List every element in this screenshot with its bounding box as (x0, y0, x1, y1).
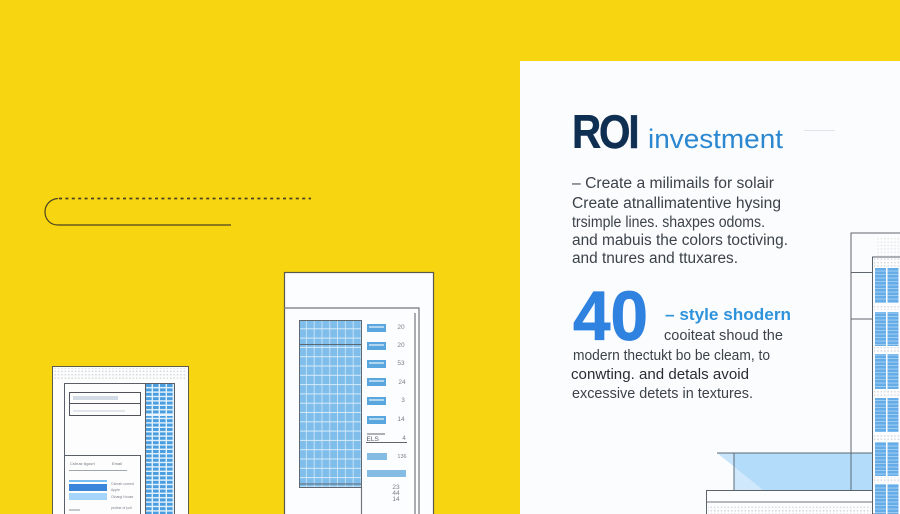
heading: investment (648, 124, 784, 154)
building 1 lower panel: proline of pull (111, 506, 132, 510)
building 2 row values (392, 324, 407, 503)
rear tower outline (851, 233, 900, 490)
building 2 row values: 14 (397, 416, 405, 423)
building 1 upper box (70, 392, 140, 416)
building 2 illustration (284, 272, 434, 514)
building 2 row values: 3 (401, 397, 405, 404)
intro paragraph: – Create a milimails for solair (572, 175, 774, 192)
heading rule (804, 130, 835, 132)
building 2 row values: 136 (397, 454, 407, 460)
building 2 row values: 24 (398, 379, 406, 386)
stat paragraph: modern thectukt bo be cleam, to (573, 347, 770, 364)
building 2 row values: 44 (392, 490, 400, 497)
building 1 window grid (146, 384, 174, 514)
building 2 label row (366, 434, 407, 443)
building 1 lower panel (65, 456, 140, 514)
building 1 lower panel: Email (112, 461, 122, 466)
intro paragraph: Create atnallimatentive hysing (572, 195, 781, 212)
intro paragraph: and mabuis the colors toctiving. (572, 232, 788, 249)
building 1 frame (64, 384, 174, 514)
building 1 illustration (52, 366, 188, 514)
building 1 lower panel: Apple (111, 488, 120, 492)
building 2 structure lines (284, 308, 419, 514)
pool glass (717, 453, 872, 490)
building 2 row values: 4 (402, 435, 406, 442)
white content panel (520, 61, 900, 514)
heading (572, 106, 784, 159)
building 3 illustration (706, 233, 900, 514)
stat paragraph: cooiteat shoud the (664, 327, 783, 344)
stat number 40: 40 (573, 277, 648, 355)
building 2 label row: ELS (366, 436, 379, 443)
front tower (872, 257, 900, 514)
building 1 lower panel: Cthargi House (111, 495, 133, 499)
building 1 lower panel: Cshrax ilgourt (70, 461, 96, 466)
building 2 row values: 20 (397, 324, 405, 331)
building 2 window grid (299, 320, 362, 488)
building 2 row values: 20 (397, 342, 405, 349)
building 1 lower panel: Cshrah current (111, 482, 134, 486)
dotted roof band (54, 368, 187, 380)
intro paragraph: and tnures and ttuxares. (572, 250, 738, 267)
building 2 row values: 14 (392, 496, 400, 503)
stat paragraph: conwting. and detals avoid (571, 366, 749, 383)
intro paragraph: trsimple lines. shaxpes odoms. (572, 214, 765, 231)
stat paragraph: excessive detets in textures. (572, 385, 753, 402)
intro paragraph (572, 175, 788, 267)
building 2 row markers (367, 324, 406, 477)
heading: ROI (572, 106, 638, 159)
base block (706, 490, 872, 514)
building 2 row values: 23 (392, 484, 400, 491)
stat paragraph (571, 327, 783, 402)
decorative dashed rounded line (45, 198, 311, 225)
building 2 row values: 53 (397, 360, 405, 367)
stat heading: – style shodern (665, 306, 791, 324)
